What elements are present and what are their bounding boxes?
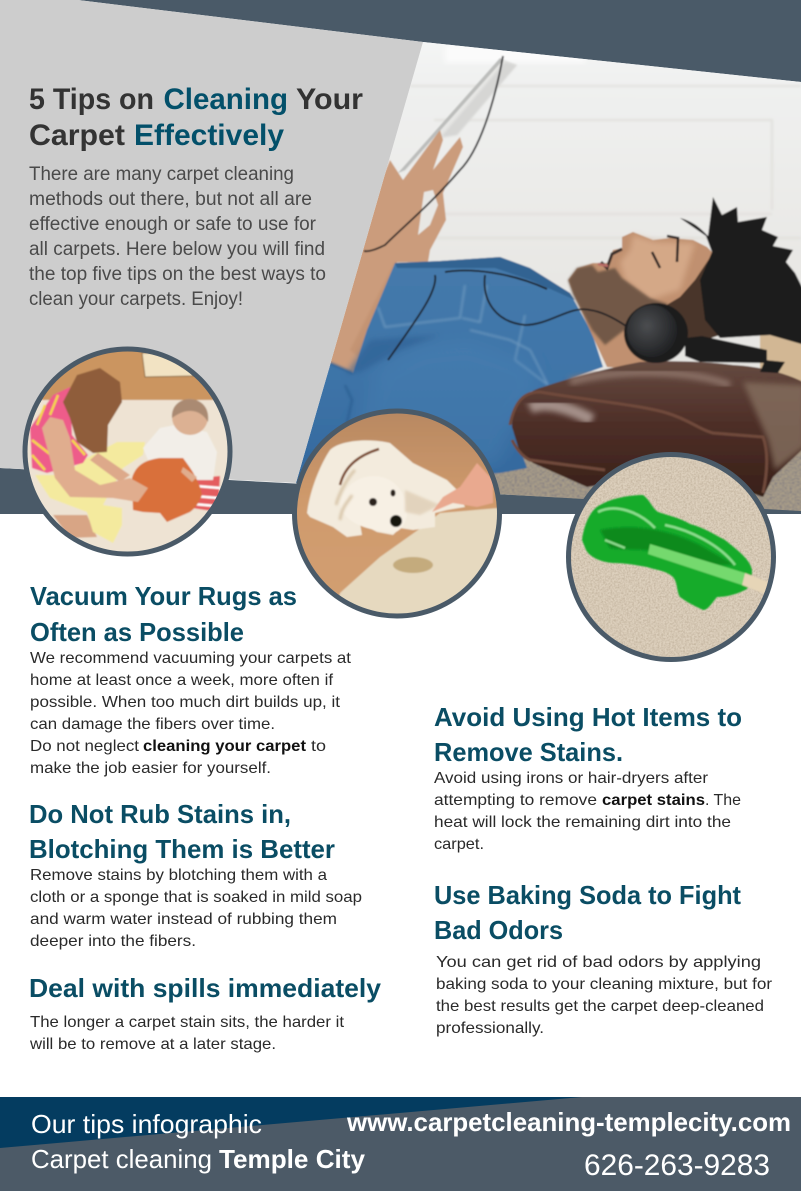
tip 5 body: the best results get the carpet deep-cleaned: [436, 998, 764, 1015]
tip 2 body: cloth or a sponge that is soaked in mild soap: [30, 889, 362, 906]
tip 3 body: The longer a carpet stain sits, the harder it: [30, 1014, 345, 1031]
footer left text: Carpet cleaning: [31, 1144, 212, 1174]
footer phone: 626-263-9283: [584, 1149, 770, 1182]
intro text: effective enough or safe to use for: [29, 214, 317, 235]
circle photo: children with piggy bank: [22, 346, 232, 556]
tip 1 body: home at least once a week, more often if: [30, 672, 334, 689]
tip 1: vacuum: [30, 581, 352, 777]
tip 5: baking soda: [434, 880, 773, 1037]
tip 4 body: Avoid using irons or hair-dryers after: [434, 770, 709, 787]
headphones: [624, 303, 785, 373]
piggy bank: [132, 458, 202, 522]
footer left text: Temple City: [219, 1144, 366, 1174]
footer website: www.carpetcleaning-templecity.com: [346, 1107, 791, 1137]
grey panel behind intro text: [0, 0, 423, 483]
carpet floor: [494, 450, 801, 511]
intro text: the top five tips on the best ways to: [29, 264, 326, 285]
intro text: methods out there, but not all are: [29, 189, 312, 210]
tip 5 body: You can get rid of bad odors by applying: [436, 954, 761, 971]
tip 1 heading: Often as Possible: [30, 617, 244, 647]
tip 4 body: carpet stains: [602, 792, 705, 809]
tip 2 body: Remove stains by blotching them with a: [30, 867, 327, 884]
tip 1 body: Do not neglect: [30, 738, 140, 755]
tip 2 body: [30, 867, 362, 950]
tip 5 body: baking soda to your cleaning mixture, but for: [436, 976, 773, 993]
tip 5 heading: Bad Odors: [434, 915, 563, 945]
tip 5 heading: Use Baking Soda to Fight: [434, 880, 741, 910]
pillow: [510, 361, 801, 497]
tip 4 heading: Remove Stains.: [434, 737, 623, 767]
footer dark blue wedge: [0, 1097, 582, 1148]
puppy: [307, 440, 465, 537]
title: Effectively: [134, 119, 284, 152]
tip 1 body: to: [311, 738, 326, 755]
tip 4 body: attempting to remove: [434, 792, 597, 809]
footer left text: [31, 1109, 366, 1174]
tip 3 body: [29, 1014, 345, 1053]
tip 3: deal with spills: [29, 973, 382, 1053]
tip 5 body: [436, 954, 773, 1037]
baby: [143, 399, 220, 512]
tip 4 body: [434, 770, 741, 853]
tip 2: do not rub: [29, 799, 362, 950]
arm and hand: [330, 130, 463, 375]
circle photo: puppy and carpet stain: [292, 408, 502, 618]
lower slate band: [0, 468, 801, 514]
tip 2 heading: Do Not Rub Stains in,: [29, 799, 291, 829]
tip 1 body: cleaning your carpet: [143, 738, 307, 755]
arms on pig: [42, 417, 197, 502]
tip 1 body: make the job easier for yourself.: [30, 760, 271, 777]
pointing hand: [432, 463, 493, 512]
title: Your: [296, 83, 363, 116]
footer left text: Our tips infographic: [31, 1109, 262, 1139]
tip 4 body: carpet.: [434, 836, 484, 853]
intro text: There are many carpet cleaning: [29, 164, 294, 185]
tip 1 body: can damage the fibers over time.: [30, 716, 275, 733]
tip 5 body: professionally.: [436, 1020, 544, 1037]
tip 1 heading: Vacuum Your Rugs as: [30, 581, 297, 611]
tablet: [398, 58, 517, 173]
tip 2 heading: Blotching Them is Better: [29, 834, 335, 864]
circle photo: green spill on carpet: [566, 452, 776, 662]
tip 3 body: will be to remove at a later stage.: [29, 1036, 276, 1053]
earphone cables: [364, 56, 626, 360]
intro text: all carpets. Here below you will find: [29, 239, 325, 260]
tip 4 heading: Avoid Using Hot Items to: [434, 702, 742, 732]
tip 4 body: heat will lock the remaining dirt into the: [434, 814, 731, 831]
tip 1 body: [30, 650, 352, 777]
tip 4 body: . The: [705, 792, 741, 809]
face and neck: [568, 232, 713, 370]
tip 1 body: possible. When too much dirt builds up, it: [30, 694, 341, 711]
tip 1 body: We recommend vacuuming your carpets at: [30, 650, 352, 667]
tip 3 heading: Deal with spills immediately: [29, 973, 382, 1003]
green spill: [582, 495, 768, 610]
shirt: [290, 257, 603, 490]
top slate band: [78, 0, 801, 82]
tip 4: avoid hot items: [434, 702, 742, 853]
title: Cleaning: [164, 83, 288, 116]
intro text: clean your carpets. Enjoy!: [29, 289, 243, 310]
photo: man lying on carpet with tablet and headphones: [280, 30, 801, 520]
footer band: [0, 1097, 801, 1191]
title: 5 Tips on: [29, 83, 154, 116]
girl: [30, 368, 145, 543]
title: Carpet: [29, 119, 125, 152]
hair: [665, 197, 801, 345]
tip 2 body: and warm water instead of rubbing them: [30, 911, 337, 928]
intro text: [29, 164, 326, 310]
tip 2 body: deeper into the fibers.: [30, 933, 196, 950]
